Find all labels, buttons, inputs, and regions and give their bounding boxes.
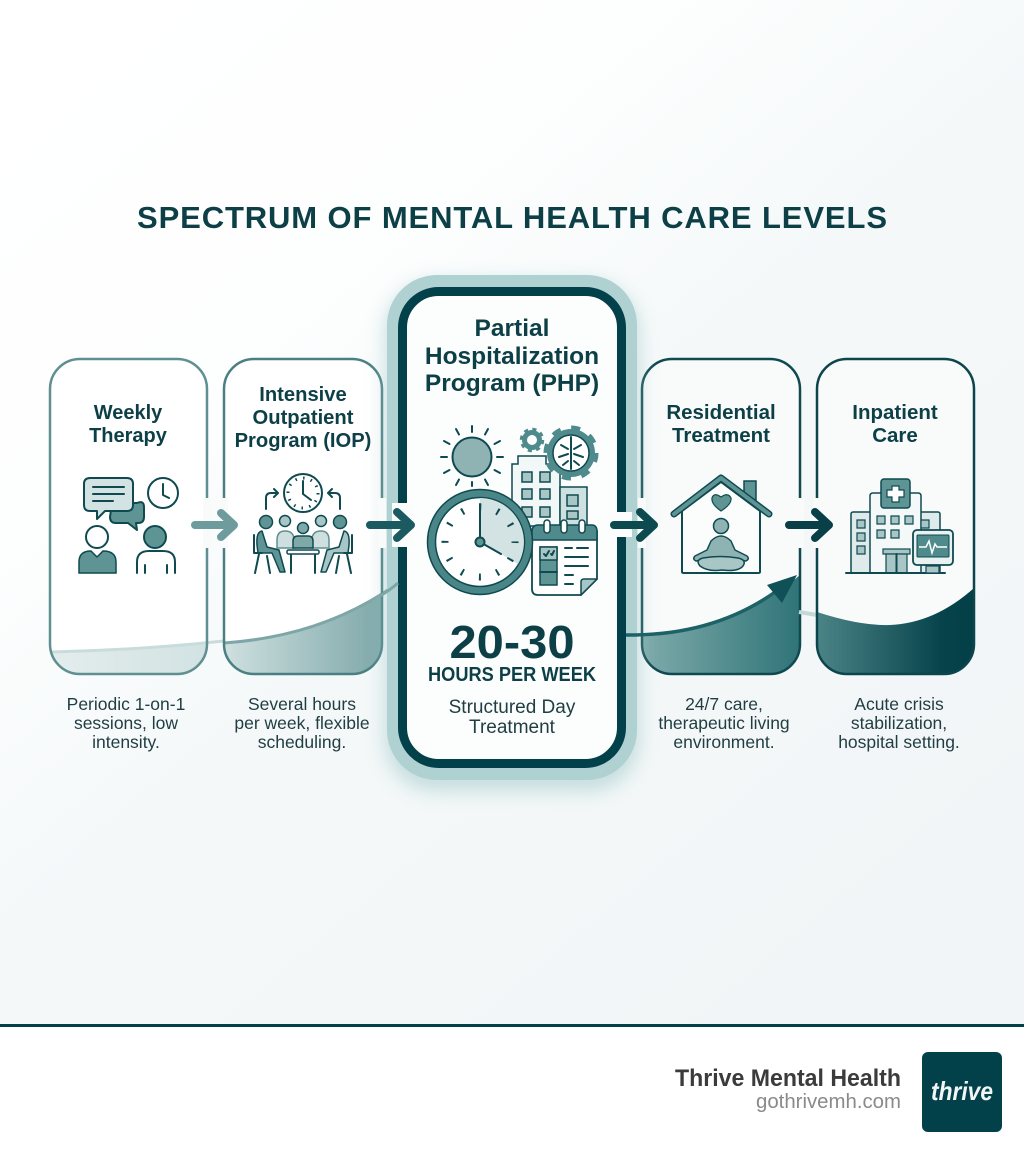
statistic: 20-30 hours per week: [428, 616, 597, 686]
description: PHP: Structured Day: [449, 697, 575, 718]
description: residential treatment: environment.: [673, 732, 775, 752]
description: IOP: per week, flexible: [234, 713, 370, 733]
description: inpatient care: hospital setting.: [838, 732, 960, 752]
description: weekly therapy: intensity.: [92, 732, 160, 752]
logo: [922, 1052, 1002, 1132]
arrow: residential to inpatient: [789, 512, 829, 538]
statistic: 20-30 hours per week: 20-30: [450, 616, 574, 668]
heading: inpatient care: Inpatient: [852, 401, 938, 424]
icon: day program collage: [428, 426, 597, 595]
description: weekly therapy: sessions, low: [74, 713, 178, 733]
description: residential treatment: 24/7 care,: [685, 694, 763, 714]
arrow: IOP to PHP: [370, 512, 411, 538]
arrow: weekly therapy to IOP: [195, 513, 234, 537]
brand name: Thrive Mental Health: [675, 1065, 901, 1092]
description: inpatient care: stabilization,: [851, 713, 947, 733]
icon: conversation: [79, 478, 178, 573]
panel: partial hospitalization program (highlighted): [384, 275, 640, 792]
wave: low intensity: [53, 644, 206, 673]
icon: hospital with monitor: [846, 479, 953, 573]
border gaps behind arrows: [203, 498, 821, 548]
description: inpatient care: Acute crisis: [854, 694, 944, 714]
panel: weekly therapy: [50, 359, 224, 674]
heading: PHP: Program (PHP): [425, 370, 599, 397]
panel: residential treatment: [642, 359, 800, 674]
trend arrow: [626, 575, 797, 635]
heading: IOP: Program (IOP): [235, 430, 371, 452]
description: PHP: Treatment: [469, 717, 556, 738]
heading: residential treatment: Residential: [666, 401, 776, 424]
footer band: [0, 1024, 1024, 1154]
heading: inpatient care: Care: [872, 424, 918, 447]
heading: IOP: Intensive: [259, 384, 347, 406]
large clock: [428, 490, 532, 594]
heading: PHP: Partial: [475, 315, 549, 342]
title: SPECTRUM OF MENTAL HEALTH CARE LEVELS: [137, 200, 887, 235]
wave: highest intensity: [817, 588, 974, 674]
description: weekly therapy: Periodic 1-on-1: [67, 694, 185, 714]
building: [512, 456, 587, 527]
icon: home with meditating person: [674, 478, 769, 573]
arrow: PHP to residential: [614, 512, 654, 538]
description: residential treatment: therapeutic living: [658, 713, 790, 733]
gear with brain: [522, 428, 596, 478]
heading: weekly therapy: Therapy: [89, 425, 168, 447]
heading: residential treatment: Treatment: [672, 424, 770, 447]
icon: group session: [254, 474, 352, 573]
sun: [441, 426, 503, 486]
description: IOP: Several hours: [248, 694, 356, 714]
heading: PHP: Hospitalization: [425, 343, 599, 370]
description: IOP: scheduling.: [258, 732, 346, 752]
calendar: [532, 520, 597, 595]
panel: intensive outpatient program: [224, 359, 398, 674]
website: gothrivemh.com: [756, 1091, 901, 1113]
logo: thrive: [931, 1076, 993, 1106]
heading: weekly therapy: Weekly: [94, 402, 162, 424]
wave: rising intensity: [224, 595, 382, 674]
wave segment over highlight: [380, 583, 398, 596]
wave: high intensity: [642, 575, 800, 674]
panel: inpatient care: [799, 359, 974, 674]
heading: IOP: Outpatient: [253, 407, 354, 429]
statistic: 20-30 hours per week: HOURS PER WEEK: [428, 664, 597, 686]
